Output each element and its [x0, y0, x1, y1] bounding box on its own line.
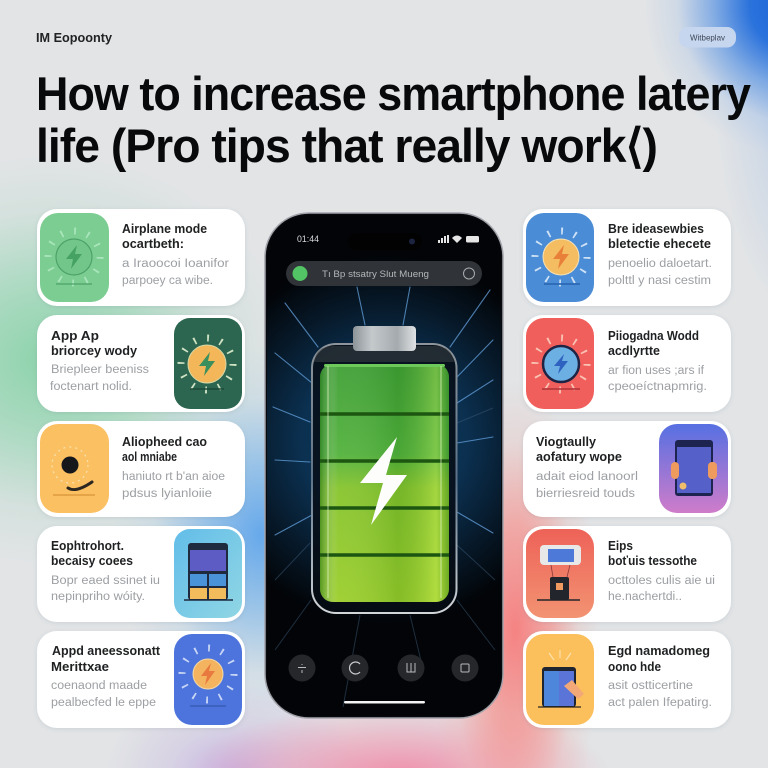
icon: dark green sun: [174, 318, 242, 409]
card: appd aneessonatt: pealbecfed le eppe: [51, 697, 156, 709]
badge: Witbeplav: [690, 32, 726, 42]
icon: red device: [526, 529, 594, 618]
card: appd aneessonatt: coenaond maade: [51, 680, 147, 692]
card: piiogadna wodd: Piiogadna Wodd: [608, 329, 699, 343]
icon: blue phone grid: [174, 529, 242, 618]
card: piiogadna wodd: [523, 315, 731, 412]
card: viogtaully: Viogtaully: [536, 435, 596, 449]
card: aliopheed: haniuto rt b'an aioe: [122, 471, 225, 483]
card: bre ideasewbies: bletectie ehecete: [608, 237, 711, 251]
brand label: IM Eopoonty: [36, 31, 112, 45]
card: app battery: foctenart nolid.: [50, 381, 132, 393]
battery cap: [353, 326, 416, 351]
card: aliopheed: Aliopheed cao: [122, 435, 207, 449]
card: airplane mode: ocartbeth:: [122, 237, 184, 251]
icon: blue sun: [174, 634, 242, 725]
status icons: [438, 235, 479, 243]
card: eips: [523, 526, 731, 622]
card: piiogadna wodd: cpeoeíctnapmrig.: [608, 381, 707, 393]
card: appd aneessonatt: Appd aneessonatt: [52, 644, 161, 658]
card: airplane mode: parpoey ca wibe.: [122, 275, 213, 287]
card: bre ideasewbies: penoelio daloetart.: [608, 258, 712, 270]
search pill: Tı Bp stsatry Slut Mueng: [322, 269, 429, 280]
battery: [312, 326, 456, 613]
card: aliopheed: [37, 421, 245, 517]
card: eophtrohort: nepinpriho wóity.: [51, 591, 145, 603]
card: app battery: [37, 315, 245, 412]
phone: [265, 213, 503, 718]
card: eips: octtoles culis aie ui: [608, 575, 715, 587]
badge: [679, 27, 736, 48]
phone frame: [265, 213, 503, 718]
card: eips: boťuis tessothe: [608, 554, 697, 568]
battery glass: [312, 344, 456, 613]
card: app battery: Briepleer beeniss: [51, 364, 149, 376]
status time: 01:44: [297, 234, 319, 245]
card: bre ideasewbies: Bre ideasewbies: [608, 222, 704, 236]
card: app battery: App Ap: [51, 329, 99, 343]
card: airplane mode: [37, 209, 245, 306]
card: viogtaully: adait eiod lanoorl: [536, 471, 638, 483]
dynamic island: [348, 233, 422, 250]
card: piiogadna wodd: acdlyrtte: [608, 344, 660, 358]
icon: blue sun: [526, 213, 594, 302]
bottom controls: [288, 654, 478, 682]
home bar: [344, 701, 425, 704]
card: viogtaully: aofatury wope: [536, 450, 622, 464]
card: eophtrohort: [37, 526, 245, 622]
card: eophtrohort: Eophtrohort.: [51, 539, 124, 553]
card: viogtaully: [523, 421, 731, 517]
card: airplane mode: a Iraoocoi Ioanifor: [122, 258, 229, 270]
card: viogtaully: bierriesreid touds: [536, 488, 635, 500]
card: bre ideasewbies: polttl y nasi cestim: [608, 275, 711, 287]
card: aliopheed: pdsus lyianloiie: [122, 488, 212, 500]
title: How to increase smartphone latery: [36, 67, 751, 120]
card: eips: Eips: [608, 539, 633, 553]
card: appd aneessonatt: Merittxae: [51, 660, 109, 674]
card: airplane mode: Airplane mode: [122, 222, 207, 236]
card: egd namadomeg: Egd namadomeg: [608, 644, 710, 658]
card: egd namadomeg: act palen Ifepatirg.: [608, 697, 712, 709]
battery fill: [320, 364, 449, 602]
card: egd namadomeg: asit ostticertine: [608, 680, 693, 692]
card: eophtrohort: becaisy coees: [51, 554, 133, 568]
icon: yellow gauge: [40, 424, 109, 513]
card: eophtrohort: Bopr eaed ssinet iu: [51, 575, 160, 587]
light rays: [273, 287, 493, 535]
title: [36, 67, 751, 172]
icon: purple tablet with hands: [659, 424, 728, 513]
title: life (Pro tips that really work⟨): [36, 119, 657, 172]
search pill: [286, 261, 482, 286]
card: piiogadna wodd: ar fion uses ;ars if: [608, 365, 705, 377]
card: aliopheed: aol mniabe: [122, 450, 177, 464]
phone screen: [267, 215, 501, 716]
card: bre ideasewbies: [523, 209, 731, 306]
card: egd namadomeg: [523, 631, 731, 728]
card: app battery: briorcey wody: [51, 344, 137, 358]
card: egd namadomeg: oono hde: [608, 660, 661, 674]
card: eips: he.nachertdi..: [608, 591, 682, 603]
icon: red sun: [526, 318, 594, 409]
card: appd aneessonatt: [37, 631, 245, 728]
icon: green sun: [40, 213, 109, 302]
battery bolt: [360, 437, 407, 525]
icon: yellow phone with hand: [526, 634, 594, 725]
